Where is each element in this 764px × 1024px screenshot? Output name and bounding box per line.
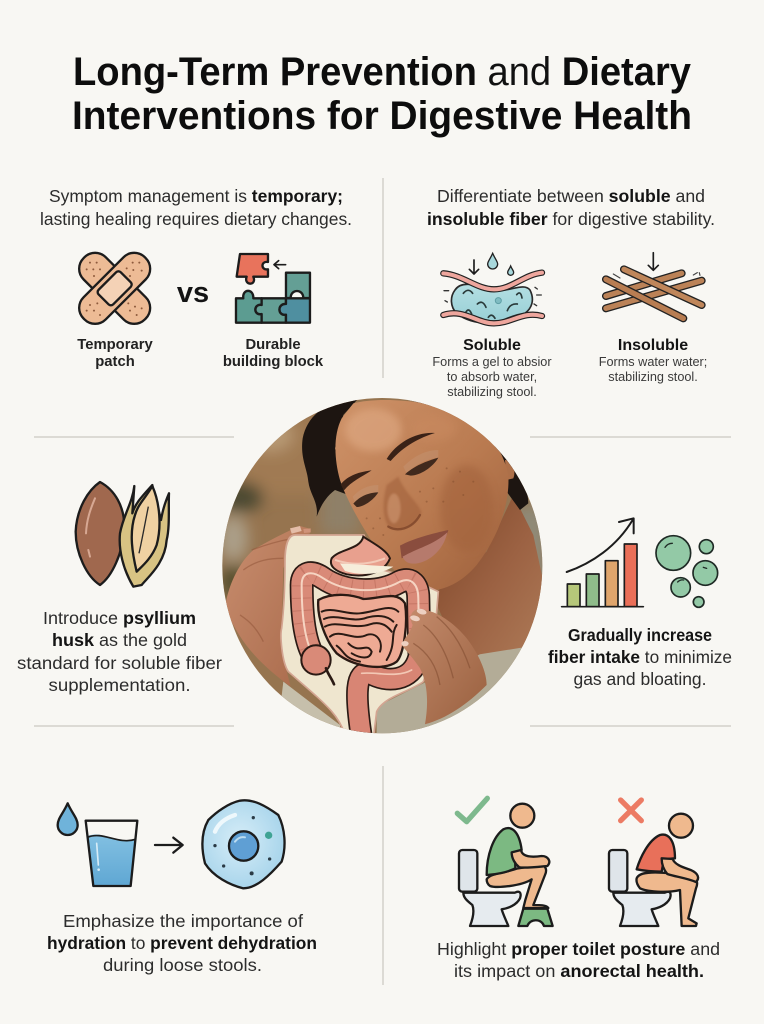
heading: differentiate fiber: Differentiate between soluble and	[437, 186, 705, 206]
label: soluble description: stabilizing stool.	[447, 385, 537, 399]
icon: rising bar chart	[562, 518, 643, 607]
icon: crossed bandages	[73, 247, 156, 330]
label: temporary patch: Temporary	[77, 337, 153, 353]
text: gradually increase: Gradually increase	[568, 625, 712, 645]
text: psyllium husk: Introduce psyllium	[43, 608, 196, 628]
icon: soluble gel	[443, 253, 542, 323]
text: psyllium husk	[17, 608, 222, 695]
panel: psyllium husk	[17, 482, 222, 695]
heading: symptom management: lasting healing requires dietary changes.	[40, 209, 352, 229]
title	[72, 50, 692, 138]
label: insoluble description: Insoluble	[618, 337, 688, 354]
neck	[437, 495, 543, 657]
label: soluble description	[432, 337, 552, 399]
icon: correct posture with footstool	[457, 798, 553, 926]
vs text: vs	[177, 277, 209, 309]
icon: psyllium seed and husk	[76, 482, 169, 587]
text: hydration: hydration to prevent dehydration	[47, 933, 317, 953]
label: soluble description: Soluble	[463, 337, 521, 354]
text: psyllium husk: supplementation.	[48, 675, 190, 695]
text: toilet posture: its impact on anorectal health.	[454, 961, 704, 981]
small intestine	[318, 595, 406, 667]
label: soluble description: Forms a gel to absior	[432, 355, 552, 369]
text: gradually increase: fiber intake to minimize	[548, 647, 732, 667]
right hand	[402, 609, 487, 724]
panel: soluble vs insoluble fiber	[427, 186, 715, 399]
label: temporary patch: patch	[95, 354, 135, 370]
text: hydration: Emphasize the importance of	[63, 911, 303, 931]
text: toilet posture	[437, 939, 720, 981]
label: insoluble description: Forms water water;	[599, 355, 707, 369]
label: durable building block	[223, 337, 324, 370]
hair	[302, 397, 528, 517]
text: gradually increase	[548, 625, 732, 689]
label: durable building block: Durable	[245, 337, 301, 353]
title: Interventions for Digestive Health	[72, 94, 692, 138]
paper anatomy card	[281, 535, 438, 738]
photo: woman holding intestine illustration	[217, 395, 547, 738]
icon: insoluble sticks	[606, 253, 702, 318]
heading: differentiate fiber	[427, 186, 715, 229]
label: soluble description: to absorb water,	[447, 370, 537, 384]
panel: toilet posture	[437, 798, 720, 981]
text: hydration: during loose stools.	[103, 955, 262, 975]
text: psyllium husk: standard for soluble fiber	[17, 653, 222, 673]
stomach	[331, 537, 390, 575]
facial features	[341, 433, 474, 564]
text: psyllium husk: husk as the gold	[52, 630, 187, 650]
panel: temporary vs durable	[40, 186, 352, 370]
label: insoluble description	[599, 337, 707, 384]
label: insoluble description: stabilizing stool.	[608, 370, 698, 384]
heading: differentiate fiber: insoluble fiber for digestive stability.	[427, 209, 715, 229]
panel: hydration	[47, 800, 317, 975]
label: temporary patch	[77, 337, 153, 370]
text: toilet posture: Highlight proper toilet posture and	[437, 939, 720, 959]
icon: incorrect posture	[609, 800, 698, 926]
colon	[302, 573, 419, 738]
panel: gradual fiber increase	[548, 518, 732, 689]
heading: symptom management	[40, 186, 352, 229]
icon: puzzle pieces	[236, 254, 310, 323]
icon: water drop, glass and cell	[58, 800, 285, 888]
heading: symptom management: Symptom management is temporary;	[49, 186, 343, 206]
title: Long-Term Prevention and Dietary	[73, 50, 692, 94]
label: durable building block: building block	[223, 354, 324, 370]
text: hydration	[47, 911, 317, 975]
icon: gas bubbles	[656, 536, 718, 607]
left hand	[226, 526, 311, 687]
text: gradually increase: gas and bloating.	[574, 669, 706, 689]
